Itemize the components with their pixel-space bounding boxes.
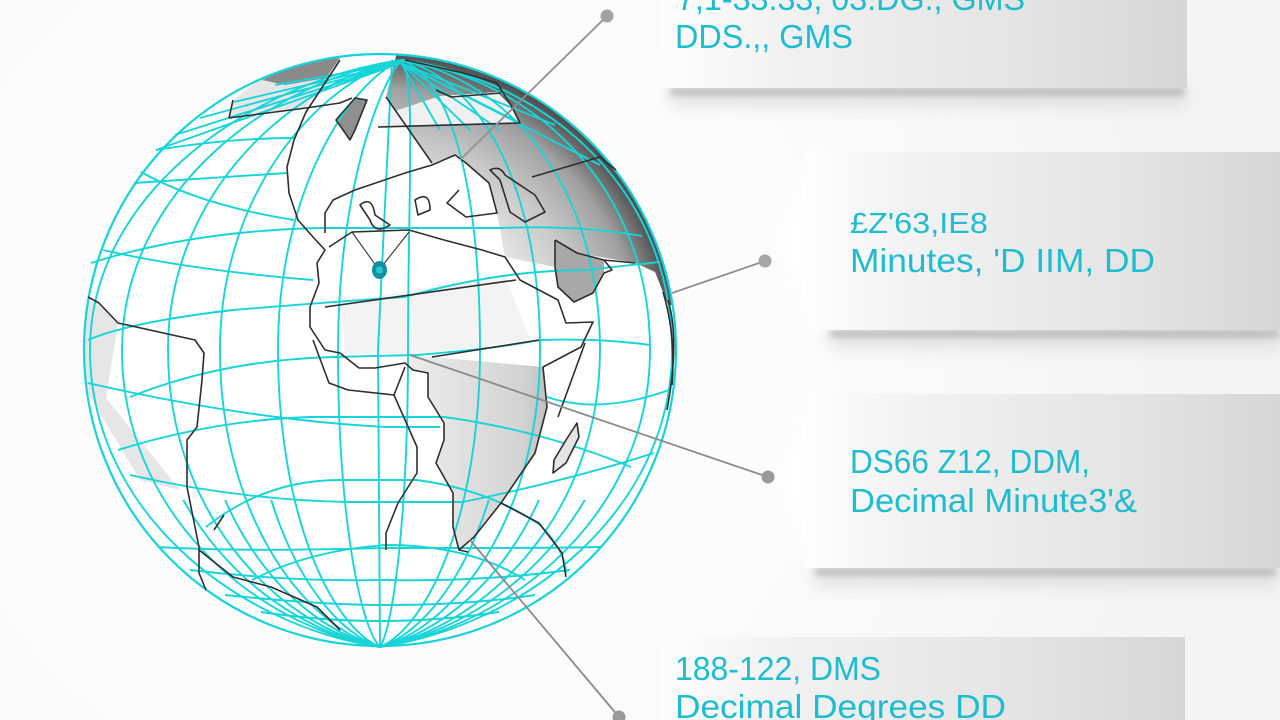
panel: top format card xyxy=(660,0,1187,106)
text: Decimal Minutes label: Decimal Minute3'& xyxy=(850,482,1137,519)
panel: bottom format card xyxy=(660,637,1185,720)
globe xyxy=(80,40,690,647)
location pin xyxy=(352,232,409,279)
panel: third format card xyxy=(775,394,1280,586)
text: DDM coordinates line: DS66 Z12, DDM, xyxy=(850,443,1090,480)
text: Minutes DM DD label: Minutes, 'D IIM, DD xyxy=(850,242,1155,279)
continent outlines xyxy=(88,60,674,630)
island: Madagascar xyxy=(553,423,579,473)
leader line to bottom card xyxy=(470,540,626,720)
panel: second format card xyxy=(775,152,1280,348)
latitude and longitude grid xyxy=(88,60,672,647)
text: DDS GMS label: DDS.,, GMS xyxy=(675,18,853,55)
text: DMS coordinates line: 188-122, DMS xyxy=(675,650,881,687)
globe outline xyxy=(84,54,676,646)
leader line to third card xyxy=(410,355,774,484)
land shading xyxy=(80,40,690,550)
globe sphere xyxy=(83,53,677,647)
leader line to second card xyxy=(672,254,772,293)
text: garbled coordinates line: £Z'63,IE8 xyxy=(850,208,988,240)
leader line to top card xyxy=(460,10,614,160)
